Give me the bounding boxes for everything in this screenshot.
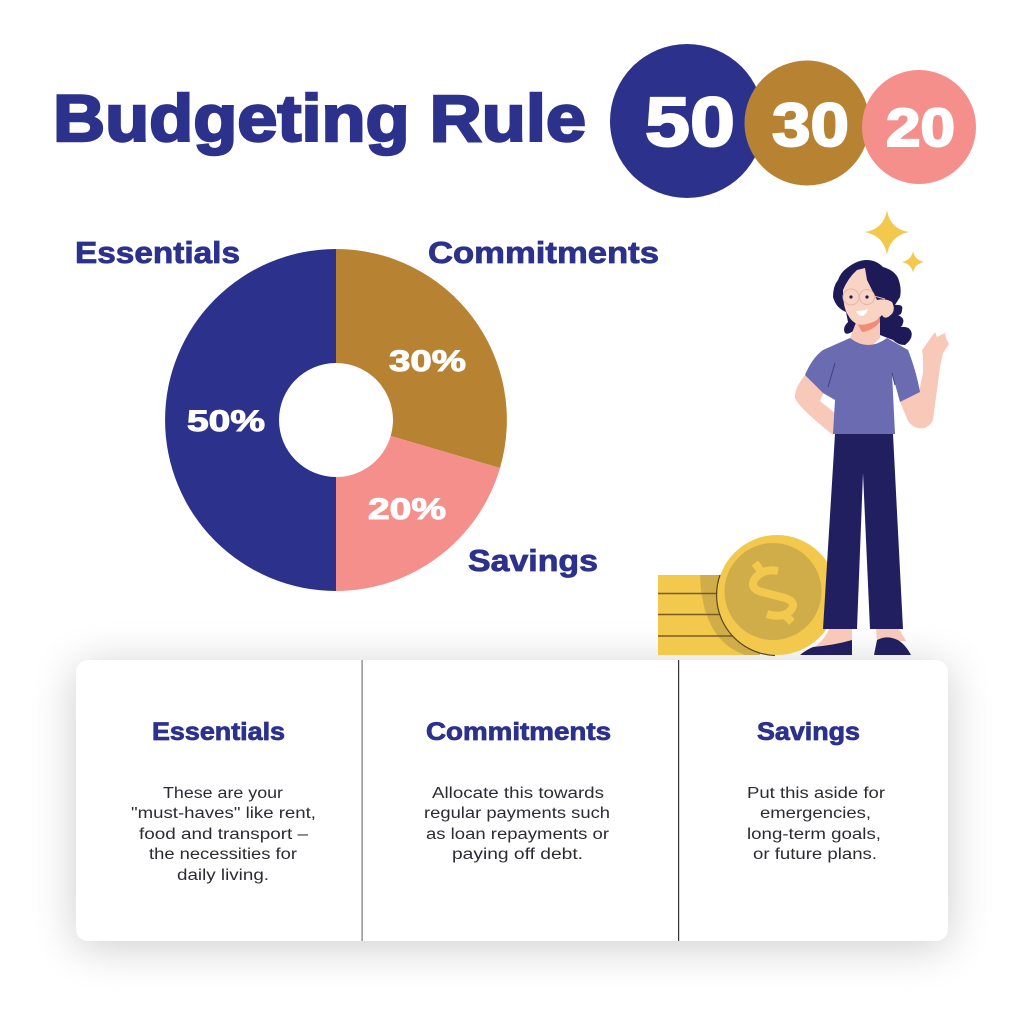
panel: info card background	[76, 660, 948, 941]
description: regular payments such	[424, 805, 610, 822]
title: Budgeting Rule	[53, 81, 586, 155]
badge 20	[862, 70, 976, 184]
panel: essentials	[131, 718, 316, 884]
slice: essentials 50%	[165, 249, 336, 591]
left arm	[795, 374, 836, 435]
donut chart	[165, 249, 507, 591]
description: These are your	[163, 785, 283, 802]
description: or future plans.	[753, 846, 877, 863]
heading: Savings	[757, 718, 860, 746]
badge 30	[744, 60, 870, 186]
badge 20: 20	[886, 98, 955, 158]
slice: commitments 30%	[336, 249, 507, 468]
label: Savings: Savings	[468, 543, 598, 578]
sleeve folds	[828, 363, 895, 387]
neck shadow	[857, 318, 880, 332]
description: the necessities for	[149, 846, 297, 863]
icon: sparkles	[865, 210, 924, 273]
value: 30%: 30%	[389, 345, 466, 378]
description	[747, 785, 885, 863]
eyes and mouth	[849, 295, 869, 316]
label: Commitments: Commitments	[428, 235, 659, 270]
right shoe	[874, 637, 911, 655]
neck	[850, 320, 880, 350]
heading: Essentials	[152, 718, 285, 746]
face	[843, 268, 894, 325]
panel: commitments	[424, 718, 611, 863]
description: paying off debt.	[452, 846, 583, 863]
badge 50: 50	[645, 83, 735, 161]
icon: coins	[658, 535, 837, 656]
description	[424, 785, 610, 863]
divider 2	[678, 660, 679, 941]
value: 50%: 50%	[187, 405, 265, 438]
panel: savings	[747, 718, 885, 863]
slice: savings 20%	[336, 436, 500, 591]
hair back	[833, 260, 912, 345]
description: Allocate this towards	[432, 785, 604, 802]
t-shirt	[805, 338, 920, 434]
badge 50	[610, 44, 764, 198]
legs skin	[813, 629, 906, 648]
description: "must-haves" like rent,	[131, 805, 316, 822]
right arm and hand	[900, 332, 949, 428]
description: long-term goals,	[747, 826, 881, 843]
badges: 50 30 20	[610, 44, 976, 198]
description	[131, 785, 316, 884]
description: food and transport –	[139, 826, 308, 843]
left shoe	[800, 640, 852, 655]
value: 20%: 20%	[368, 493, 446, 526]
description: daily living.	[177, 867, 269, 884]
trousers	[823, 434, 903, 629]
glasses	[843, 289, 885, 305]
label: Essentials: Essentials	[75, 235, 240, 270]
badge 30: 30	[772, 91, 849, 159]
divider 1	[362, 660, 363, 941]
description: emergencies,	[760, 805, 871, 822]
illustration: woman	[795, 260, 949, 655]
heading: Commitments	[426, 718, 611, 746]
description: as loan repayments or	[426, 826, 609, 843]
description: Put this aside for	[747, 785, 885, 802]
